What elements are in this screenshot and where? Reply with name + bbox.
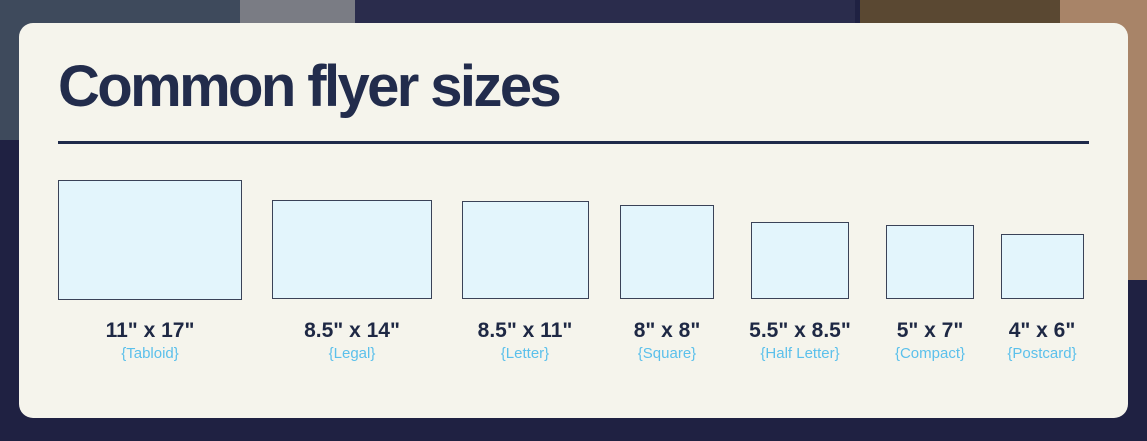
rect: tabloid — [58, 180, 242, 300]
label: compact — [895, 319, 965, 362]
label: tabloid: {Tabloid} — [121, 345, 179, 362]
label: half letter — [749, 319, 851, 362]
label: letter: 8.5" x 11" — [478, 319, 572, 342]
label: tabloid: 11" x 17" — [106, 319, 194, 342]
label: half letter: 5.5" x 8.5" — [749, 319, 851, 342]
label: tabloid — [106, 319, 194, 362]
label: half letter: {Half Letter} — [760, 345, 840, 362]
label: legal: {Legal} — [329, 345, 375, 362]
label: letter: {Letter} — [501, 345, 549, 362]
label: postcard — [1007, 319, 1077, 362]
label: square: {Square} — [638, 345, 696, 362]
label: compact: 5" x 7" — [897, 319, 963, 342]
rect: postcard — [1001, 234, 1084, 299]
label: legal: 8.5" x 14" — [304, 319, 400, 342]
label: compact: {Compact} — [895, 345, 965, 362]
rect: compact — [886, 225, 974, 299]
label: postcard: 4" x 6" — [1009, 319, 1075, 342]
rect: letter — [462, 201, 589, 299]
label: postcard: {Postcard} — [1007, 345, 1077, 362]
label: legal — [304, 319, 400, 362]
label: letter — [478, 319, 572, 362]
title: Common flyer sizes — [58, 54, 559, 119]
label: square — [634, 319, 700, 362]
rect: square — [620, 205, 714, 299]
rect: half letter — [751, 222, 849, 299]
rect: legal — [272, 200, 432, 299]
label: square: 8" x 8" — [634, 319, 700, 342]
